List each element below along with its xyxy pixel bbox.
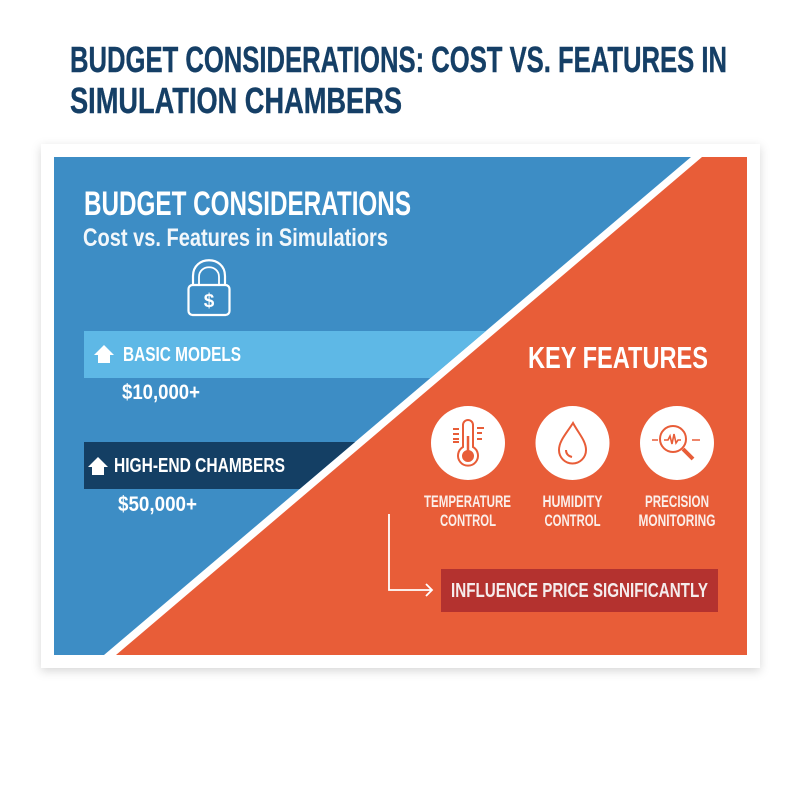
icon: up arrow — [94, 345, 114, 363]
icon: up arrow — [88, 457, 108, 475]
bar: high-end chambers — [84, 442, 374, 489]
price: basic models: $10,000+ — [122, 381, 200, 404]
callout: influence price significantly — [441, 569, 718, 612]
callout: influence price significantly: INFLUENCE PRICE SIGNIFICANTLY — [451, 580, 708, 602]
icon: thermometer — [431, 406, 505, 480]
label: temperature control: CONTROL — [440, 511, 496, 530]
icon: padlock with dollar sign: $ — [204, 291, 215, 312]
bar: basic models — [84, 331, 504, 378]
feature: precision monitoring — [638, 406, 716, 530]
title: SIMULATION CHAMBERS — [70, 80, 402, 121]
icon: water drop — [536, 406, 610, 480]
label: precision monitoring — [638, 492, 716, 530]
label: humidity control: CONTROL — [544, 511, 600, 530]
feature: temperature control — [424, 406, 511, 530]
icon: padlock with dollar sign — [188, 260, 230, 315]
label: precision monitoring: PRECISION — [645, 492, 709, 511]
label: precision monitoring: MONITORING — [638, 511, 716, 530]
subheading: Cost vs. Features in Simulatiors — [83, 224, 388, 252]
feature: humidity control — [536, 406, 610, 530]
title — [70, 39, 727, 121]
heading: key features: KEY FEATURES — [528, 340, 708, 375]
icon: magnifier with pulse — [640, 406, 714, 480]
label: humidity control: HUMIDITY — [542, 492, 603, 511]
label: humidity control — [542, 492, 603, 530]
price: high-end chambers: $50,000+ — [118, 493, 197, 516]
panel: cost side (blue) — [54, 157, 691, 655]
label: high-end chambers: HIGH-END CHAMBERS — [114, 455, 285, 477]
heading: budget considerations: BUDGET CONSIDERATIONS — [84, 185, 411, 223]
label: basic models: BASIC MODELS — [123, 344, 241, 366]
label: temperature control — [424, 492, 511, 530]
arrow: features to price influence — [389, 514, 432, 596]
label: temperature control: TEMPERATURE — [424, 492, 511, 511]
panel: infographic card — [41, 144, 760, 668]
panel: features side (orange) — [116, 157, 747, 655]
